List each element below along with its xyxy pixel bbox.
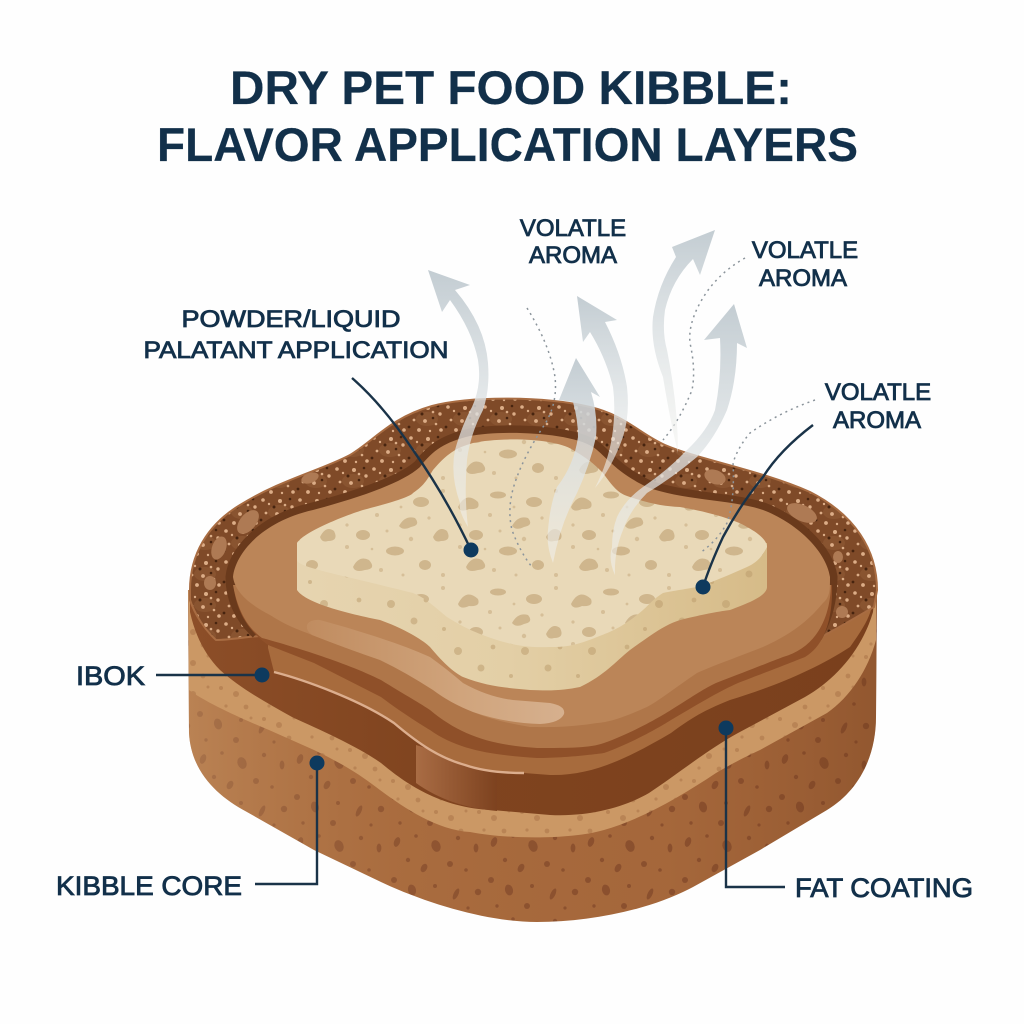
title: FLAVOR APPLICATION LAYERS: [157, 118, 858, 171]
glossy sheen on plate: [307, 620, 564, 724]
kibble cross-section illustration: [188, 399, 877, 922]
lower plate layer: [233, 585, 831, 748]
leader: fat coating: [718, 720, 785, 887]
highlight line: [274, 672, 524, 773]
label: volatile aroma 3: AROMA: [833, 407, 921, 434]
cream side wall: [297, 543, 767, 690]
arrow 1: [428, 270, 488, 527]
label: volatile aroma 1: AROMA: [529, 242, 617, 269]
label: volatile aroma 2: AROMA: [759, 265, 847, 292]
thin dark layer: [234, 585, 832, 758]
leader: palatant application: [352, 378, 478, 558]
fat coating tan band: [189, 590, 876, 837]
arrow 4: [652, 230, 715, 453]
crust bubbles: [204, 467, 848, 618]
crust top layer: [190, 399, 877, 640]
palatant plate: [233, 433, 830, 727]
aroma arrows: [428, 230, 747, 575]
leader: kibble core: [255, 756, 324, 884]
label: volatile aroma 1: VOLATLE: [520, 215, 626, 242]
label: ibok: IBOK: [76, 661, 145, 691]
arrow 3: [548, 358, 600, 563]
title: [157, 61, 858, 171]
label: fat coating: FAT COATING: [795, 873, 973, 903]
glossy reflection on dark band: [416, 745, 497, 811]
leader: ibok: [156, 668, 270, 682]
label: powder/liquid palatant application: POWDER/LIQUID: [182, 306, 400, 333]
leader: volatile aroma: [696, 425, 813, 594]
label: kibble core: KIBBLE CORE: [56, 871, 242, 901]
kibble core body: [188, 590, 877, 922]
arrow 5: [611, 304, 747, 575]
mid brown layer: [268, 580, 872, 775]
cream interior surface: [297, 439, 767, 647]
dark brown band: [190, 590, 875, 815]
arrow 2: [577, 296, 628, 488]
label: palatant application: PALATANT APPLICATION: [144, 337, 448, 364]
aroma dotted trails: [510, 258, 815, 567]
dark inner crust rim: [233, 433, 830, 636]
label: volatile aroma 2: VOLATLE: [752, 237, 858, 264]
title: DRY PET FOOD KIBBLE:: [230, 61, 792, 114]
label: volatile aroma 3: VOLATLE: [825, 379, 931, 406]
